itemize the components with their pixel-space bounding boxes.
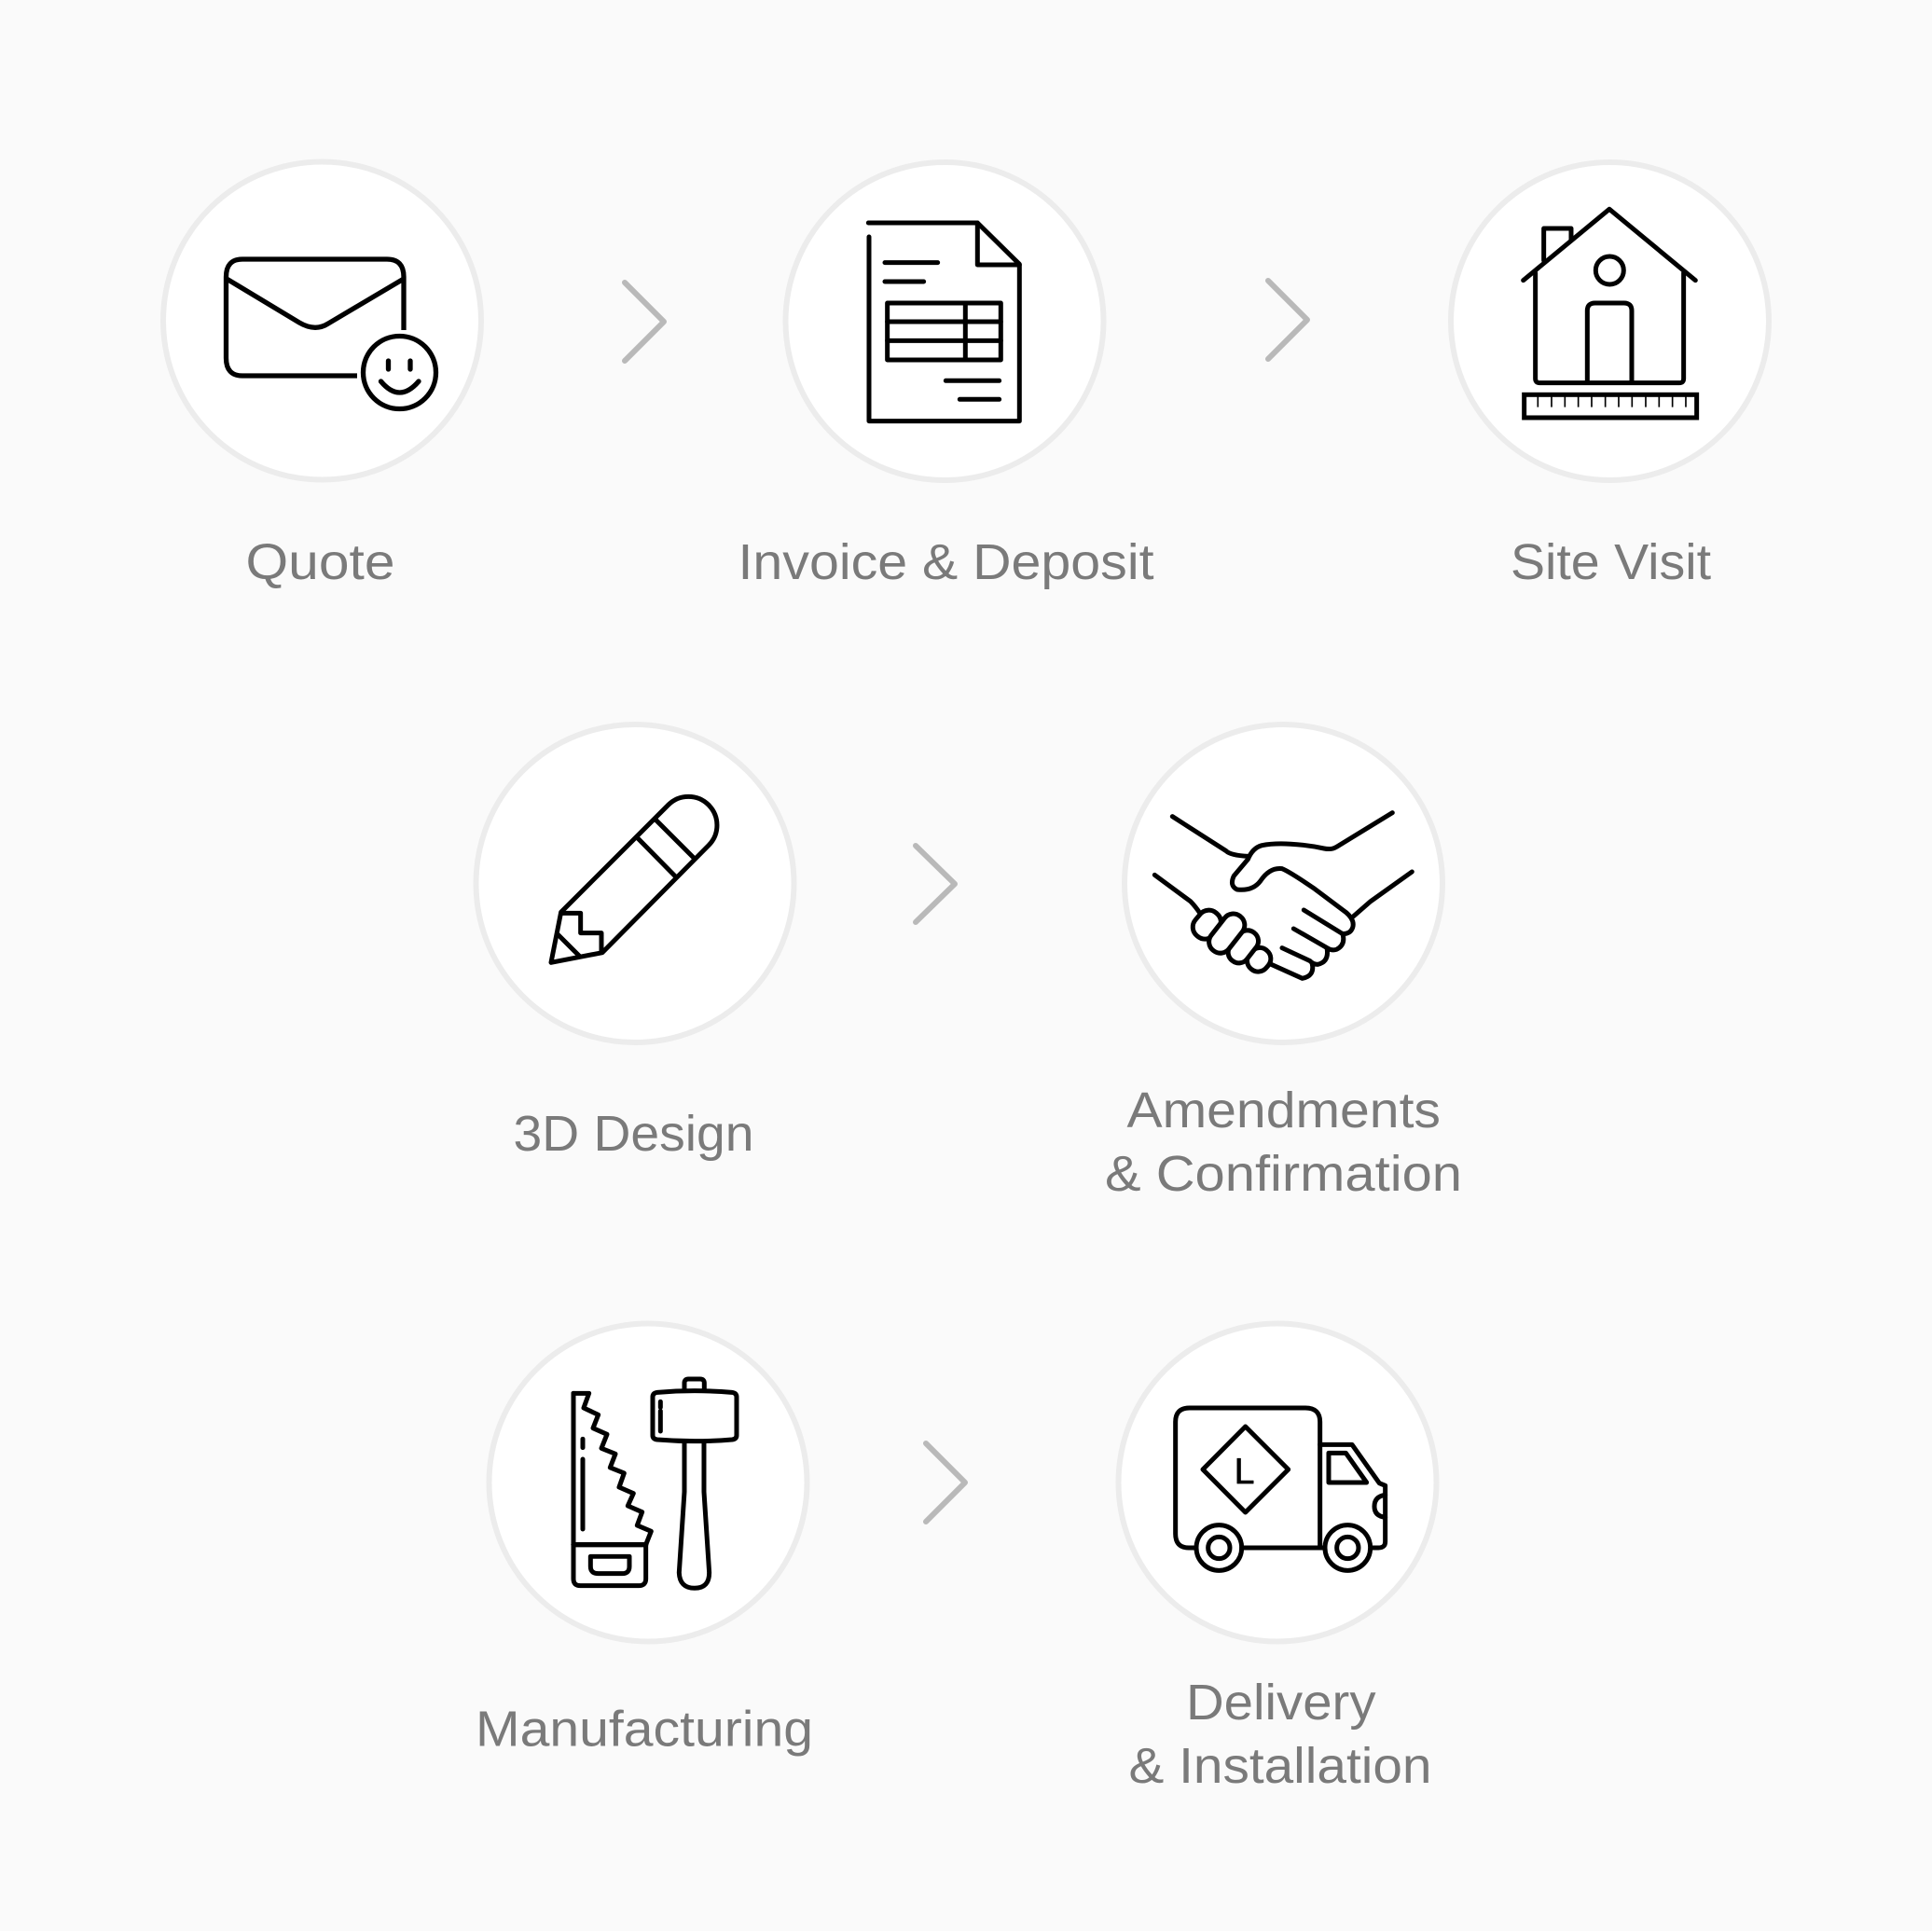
label: Amendments & Confirmation: & Confirmation [1105,1146,1462,1202]
icon: envelope with smiley [226,259,436,408]
step: Quote [163,162,481,590]
label: Amendments & Confirmation: Amendments [1126,1083,1441,1138]
icon: invoice document [868,223,1019,421]
label: Site Visit: Site Visit [1511,534,1711,590]
arrow: Manufacturing to Delivery [926,1443,965,1522]
step: Delivery & Installation [1119,1324,1436,1794]
label: Invoice & Deposit: Invoice & Deposit [738,534,1154,590]
label: 3D Design: 3D Design [513,1106,753,1162]
arrow: 3D Design to Amendments [916,846,955,922]
icon: house with ruler [1524,209,1697,418]
label: Delivery & Installation [1128,1675,1432,1794]
label: Quote: Quote [246,534,395,590]
icon: delivery truck [1176,1408,1386,1570]
icon: saw and hammer [573,1379,737,1588]
circle: 3D Design [476,724,794,1042]
step: Invoice & Deposit [738,162,1154,590]
logo letter: L [1235,1451,1255,1492]
step: Manufacturing [476,1324,813,1757]
arrow: Quote to Invoice [625,283,664,361]
circle: Site Visit [1451,162,1769,480]
arrow: Invoice to Site Visit [1268,281,1307,359]
icon: pencil [551,796,717,962]
circle: Invoice [785,162,1104,480]
step: Site Visit [1451,162,1769,590]
step: Amendments & Confirmation [1105,724,1462,1202]
circle: Quote [163,162,481,479]
label: Delivery & Installation: & Installation [1128,1738,1432,1794]
circle: Manufacturing [489,1324,807,1641]
icon: handshake [1154,813,1412,978]
label: Amendments & Confirmation [1105,1083,1462,1202]
circle: Delivery [1119,1324,1436,1641]
label: Delivery & Installation: Delivery [1186,1675,1376,1731]
step: 3D Design [476,724,794,1162]
label: Manufacturing: Manufacturing [476,1701,813,1757]
circle: Amendments [1125,724,1442,1042]
